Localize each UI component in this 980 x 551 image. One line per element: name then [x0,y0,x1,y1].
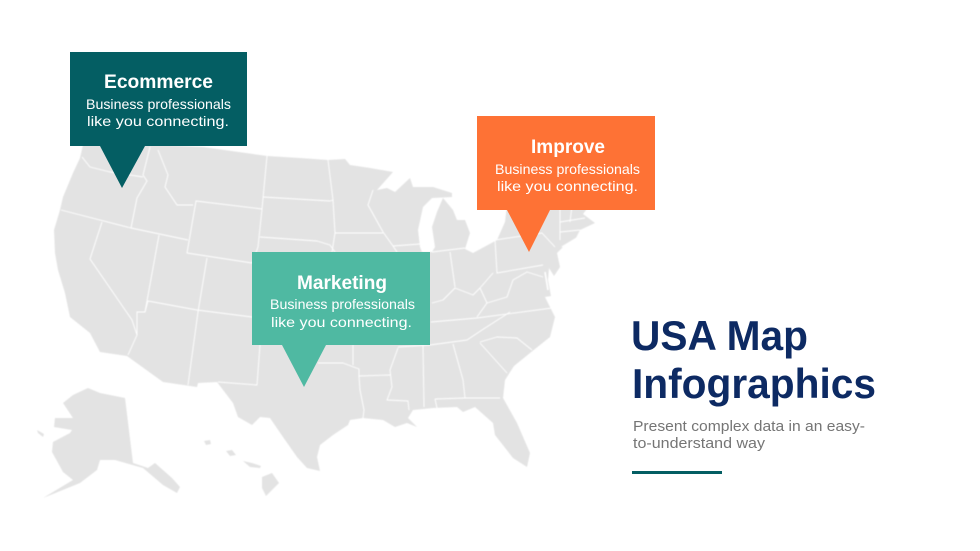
callout: Marketing: Marketing [297,273,387,294]
callout: Ecommerce: Ecommerce [104,72,213,93]
map: state borders [61,147,585,418]
subtitle: to-understand way [633,435,766,452]
map: Alaska [43,388,180,498]
accent rule [632,471,722,474]
callout: Improve: Improve [531,137,605,158]
callout: Ecommerce: like you connecting. [87,113,229,129]
title [631,312,876,407]
callout: Improve: Business professionals [495,161,640,177]
subtitle: Present complex data in an easy- [633,418,865,435]
callout: Marketing [252,252,430,387]
callout: Marketing: like you connecting. [271,314,412,330]
callout: Ecommerce [70,52,247,188]
callout: Marketing: Business professionals [270,296,415,312]
map: Aleutian islet [37,430,44,437]
subtitle [633,418,865,452]
title: Infographics [632,360,876,407]
map: Hawaii [204,440,279,496]
callout: Improve [477,116,655,252]
map: USA [37,145,595,498]
title: USA Map [631,312,808,359]
map: contiguous states [54,145,595,471]
callout: Ecommerce: Business professionals [86,96,231,112]
callout: Improve: like you connecting. [497,178,638,194]
